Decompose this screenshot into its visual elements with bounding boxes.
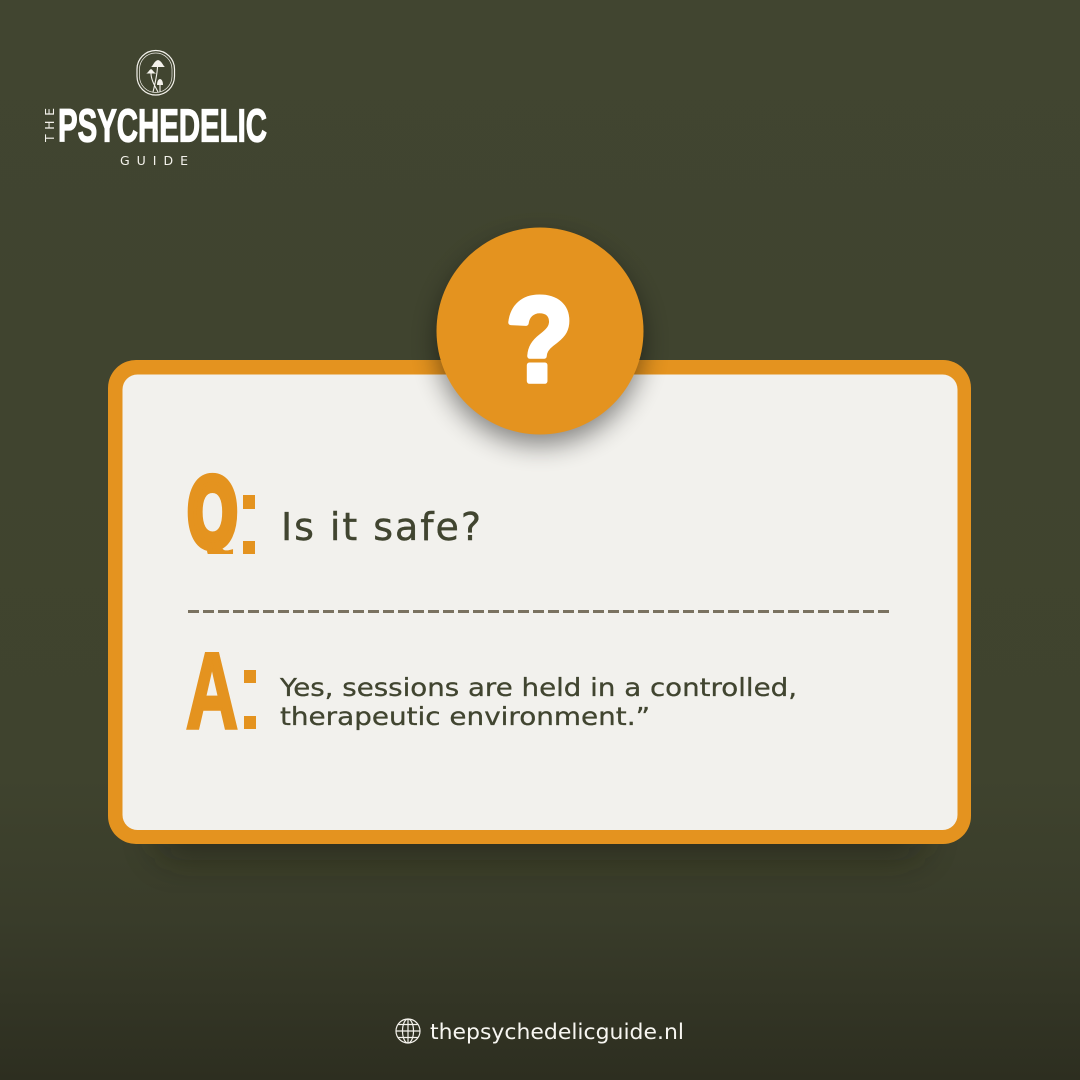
question label: Q <box>188 457 237 567</box>
logo: The Psychedelic Guide <box>42 50 267 168</box>
icon: question mark badge <box>436 228 644 445</box>
icon: mushroom emblem <box>137 50 174 95</box>
website address: thepsychedelicguide.nl <box>430 1020 684 1045</box>
icon: globe <box>396 1019 420 1043</box>
question label <box>188 472 255 554</box>
answer text <box>279 673 797 731</box>
text: THE: THE <box>42 108 57 143</box>
icon: question mark badge: ? <box>506 274 573 407</box>
footer: website <box>396 1019 684 1045</box>
question text: Is it safe? <box>281 505 481 549</box>
wordmark: PSYCHEDELIC: PSYCHEDELIC <box>58 100 267 152</box>
text: GUIDE: GUIDE <box>120 153 188 168</box>
answer text: Yes, sessions are held in a controlled, <box>279 673 797 702</box>
answer label: A <box>186 630 238 751</box>
panel: question and answer card <box>108 360 971 860</box>
answer text: therapeutic environment.” <box>280 702 650 731</box>
dashed divider <box>188 610 891 613</box>
